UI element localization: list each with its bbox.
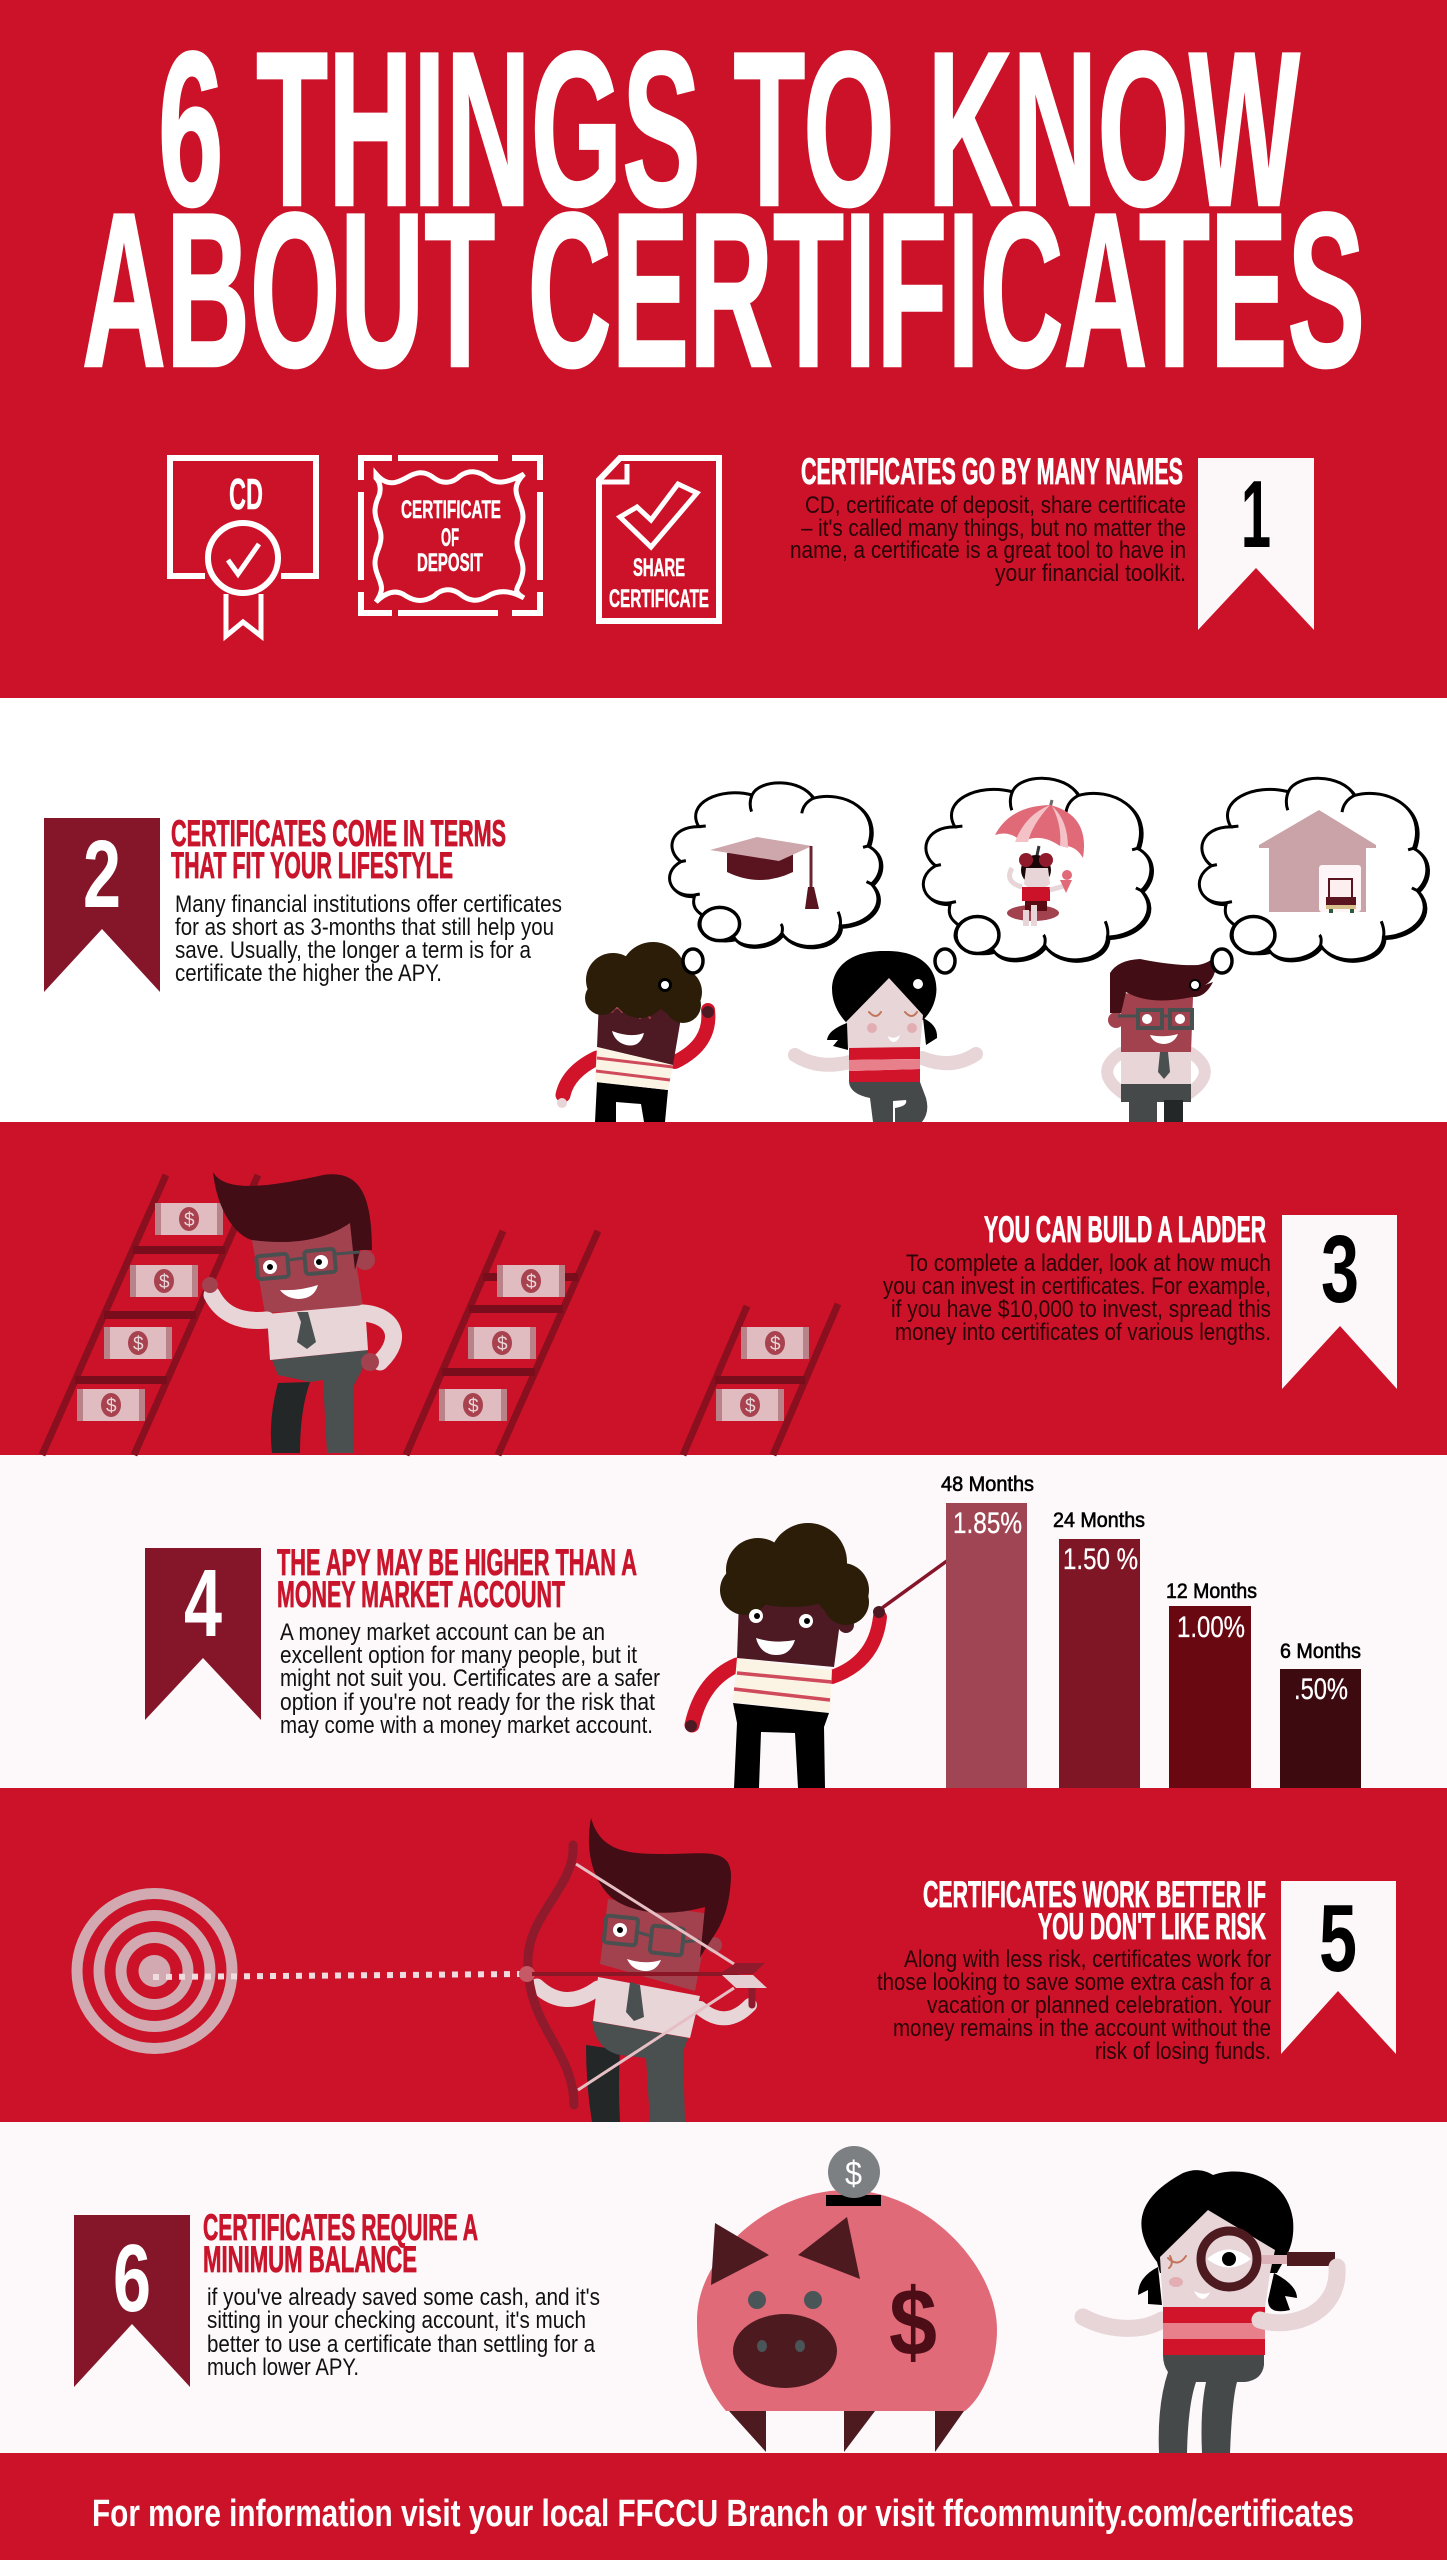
heading: section 4: MONEY MARKET ACCOUNT bbox=[277, 1574, 565, 1615]
ribbon: number 4: 4 bbox=[184, 1550, 222, 1657]
icon: CD certificate with seal bbox=[170, 458, 316, 636]
bar chart: APY by term: 6 Months bbox=[1280, 1640, 1361, 1663]
text block: section 2: for as short as 3-months that still help you bbox=[175, 914, 554, 941]
text block: section 3: money into certificates of various lengths. bbox=[895, 1319, 1271, 1346]
character: man with glasses on ladder bbox=[202, 1172, 394, 1453]
ribbon: number 2 bbox=[44, 818, 160, 992]
bar chart: APY by term: 12 Months bbox=[1166, 1580, 1257, 1603]
character: curly hair man with pointer bbox=[685, 1523, 962, 1788]
text block: section 1: CD, certificate of deposit, share certificate bbox=[805, 492, 1186, 519]
panel: section 4 APY bbox=[145, 1473, 1361, 1788]
text block: section 6: if you've already saved some cash, and it's bbox=[207, 2284, 600, 2311]
bar chart: APY by term: .50% bbox=[1294, 1673, 1348, 1706]
text block: section 3 bbox=[883, 1250, 1271, 1346]
bar chart: APY by term: 48 Months bbox=[941, 1473, 1034, 1496]
icon: certificate of deposit stamp: CERTIFICATE bbox=[401, 496, 501, 524]
ladder 1 with bills: $ bbox=[133, 1334, 144, 1355]
ribbon: number 1: 1 bbox=[1241, 461, 1271, 568]
heading: section 6 bbox=[203, 2207, 478, 2280]
ribbon: number 4 bbox=[145, 1548, 261, 1720]
text block: section 6: better to use a certificate than settling for a bbox=[207, 2331, 596, 2358]
character: man with glasses bbox=[1107, 949, 1232, 1122]
icon: certificate of deposit stamp: DEPOSIT bbox=[417, 549, 483, 577]
ribbon: number 5: 5 bbox=[1319, 1885, 1357, 1992]
text block: section 3: if you have $10,000 to invest, spread this bbox=[891, 1296, 1271, 1323]
thought bubble: vacation umbrella bbox=[923, 778, 1152, 961]
bar chart: APY by term: 1.50 % bbox=[1063, 1543, 1138, 1576]
ladder 3 with bills: $ bbox=[745, 1396, 756, 1417]
icon: target bbox=[72, 1888, 238, 2054]
text block: section 5: vacation or planned celebration. Your bbox=[927, 1992, 1271, 2019]
bar chart: APY by term: 1.85% bbox=[953, 1507, 1022, 1540]
title bbox=[82, 6, 1365, 413]
text block: section 1: – it's called many things, but no matter the bbox=[801, 515, 1186, 542]
heading: section 2 bbox=[171, 813, 506, 886]
panel: section 1 certificate names bbox=[170, 451, 1314, 636]
ladder 1 with bills bbox=[42, 1175, 258, 1455]
icon: certificate of deposit stamp: OF bbox=[441, 524, 459, 552]
ribbon: number 3: 3 bbox=[1321, 1216, 1359, 1323]
text block: section 2: save. Usually, the longer a term is for a bbox=[175, 937, 532, 964]
heading: section 5: YOU DON'T LIKE RISK bbox=[1038, 1906, 1266, 1947]
icon: share certificate document bbox=[599, 458, 719, 621]
icon: certificate of deposit stamp bbox=[361, 458, 540, 613]
heading: section 2: CERTIFICATES COME IN TERMS bbox=[171, 813, 506, 854]
text block: section 4: might not suit you. Certificates are a safer bbox=[280, 1665, 660, 1692]
text block: section 1: your financial toolkit. bbox=[995, 560, 1186, 587]
text block: section 6 bbox=[207, 2284, 600, 2381]
ladder 2 with bills: $ bbox=[526, 1272, 537, 1293]
ladder 1 with bills: $ bbox=[184, 1210, 195, 1231]
ladder 2 with bills bbox=[406, 1231, 598, 1455]
character: curly hair man bbox=[557, 942, 714, 1122]
text block: section 5 bbox=[877, 1946, 1272, 2065]
panel: section 3 ladder bbox=[42, 1172, 1397, 1455]
text block: section 2: certificate the higher the APY. bbox=[175, 960, 442, 987]
ribbon: number 6: 6 bbox=[113, 2225, 151, 2332]
heading: section 1: CERTIFICATES GO BY MANY NAMES bbox=[801, 451, 1183, 492]
ribbon: number 1 bbox=[1198, 458, 1314, 630]
text block: section 4: A money market account can be an bbox=[280, 1619, 605, 1646]
text block: section 5: those looking to save some extra cash for a bbox=[877, 1969, 1272, 1996]
arrow path: dotted line bbox=[153, 1974, 520, 1977]
text block: section 5: risk of losing funds. bbox=[1095, 2038, 1271, 2065]
character: archer with bow bbox=[519, 1818, 767, 2122]
bar chart: APY by term: 24 Months bbox=[1053, 1509, 1145, 1532]
ladder 1 with bills: $ bbox=[159, 1272, 170, 1293]
icon: CD certificate with seal: CD bbox=[229, 470, 263, 519]
heading: section 4: THE APY MAY BE HIGHER THAN A bbox=[277, 1542, 637, 1583]
text block: section 1 bbox=[790, 492, 1186, 587]
text block: section 4: excellent option for many people, but it bbox=[280, 1642, 637, 1669]
ribbon: number 6 bbox=[74, 2215, 190, 2387]
text block: section 6: sitting in your checking account, it's much bbox=[207, 2307, 586, 2334]
text block: section 2 bbox=[175, 891, 562, 987]
heading: section 5 bbox=[923, 1874, 1266, 1947]
text block: section 5: money remains in the account without the bbox=[893, 2015, 1271, 2042]
character: girl with magnifying glass bbox=[1083, 2170, 1337, 2453]
thought bubble: house with car bbox=[1199, 778, 1428, 961]
bar chart: APY by term: 1.00% bbox=[1177, 1611, 1245, 1644]
text block: section 4: option if you're not ready for the risk that bbox=[280, 1689, 655, 1716]
character: girl dreaming bbox=[795, 949, 976, 1122]
bar chart: APY by term bbox=[941, 1473, 1361, 1788]
ladder 3 with bills: $ bbox=[770, 1334, 781, 1355]
ladder 2 with bills: $ bbox=[497, 1334, 508, 1355]
panel: section 2 terms bbox=[44, 778, 1428, 1122]
text block: section 3: you can invest in certificates. For example, bbox=[883, 1273, 1271, 1300]
text block: section 4 bbox=[280, 1619, 660, 1739]
icon: share certificate document: CERTIFICATE bbox=[609, 585, 709, 613]
icon: piggy bank with coin: $ bbox=[845, 2155, 862, 2193]
ladder 1 with bills: $ bbox=[106, 1396, 117, 1417]
panel: section 5 risk bbox=[72, 1818, 1396, 2122]
ladder 2 with bills: $ bbox=[468, 1396, 479, 1417]
icon: share certificate document: SHARE bbox=[633, 554, 685, 582]
icon: piggy bank with coin bbox=[697, 2146, 997, 2452]
ribbon: number 3 bbox=[1282, 1215, 1397, 1389]
panel: section 6 minimum balance bbox=[74, 2146, 1337, 2453]
ribbon: number 2: 2 bbox=[83, 821, 121, 928]
text block: section 3: To complete a ladder, look at how much bbox=[906, 1250, 1271, 1277]
thought bubble: graduation cap bbox=[670, 783, 882, 948]
ladder 3 with bills bbox=[683, 1304, 838, 1455]
icon: piggy bank with coin: $ bbox=[889, 2269, 937, 2376]
heading: section 6: MINIMUM BALANCE bbox=[203, 2239, 417, 2280]
text block: section 5: Along with less risk, certificates work for bbox=[904, 1946, 1271, 1973]
heading: section 4 bbox=[277, 1542, 637, 1615]
text block: section 6: much lower APY. bbox=[207, 2354, 359, 2381]
text block: section 4: may come with a money market account. bbox=[280, 1712, 653, 1739]
ribbon: number 5 bbox=[1281, 1881, 1396, 2054]
text block: section 1: name, a certificate is a great tool to have in bbox=[790, 537, 1186, 564]
heading: section 2: THAT FIT YOUR LIFESTYLE bbox=[171, 845, 453, 886]
text block: section 2: Many financial institutions offer certificates bbox=[175, 891, 562, 918]
heading: section 6: CERTIFICATES REQUIRE A bbox=[203, 2207, 478, 2248]
